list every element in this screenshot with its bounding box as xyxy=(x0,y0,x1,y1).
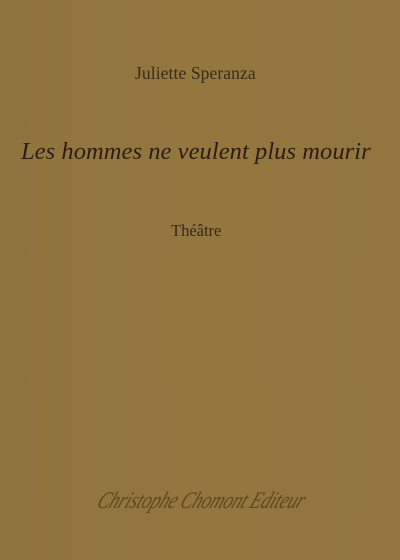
author name: Juliette Speranza xyxy=(135,63,256,83)
book title: Les hommes ne veulent plus mourir xyxy=(21,138,371,165)
genre label: Théâtre xyxy=(171,221,221,240)
publisher signature: Christophe Chomont Editeur xyxy=(94,487,310,513)
